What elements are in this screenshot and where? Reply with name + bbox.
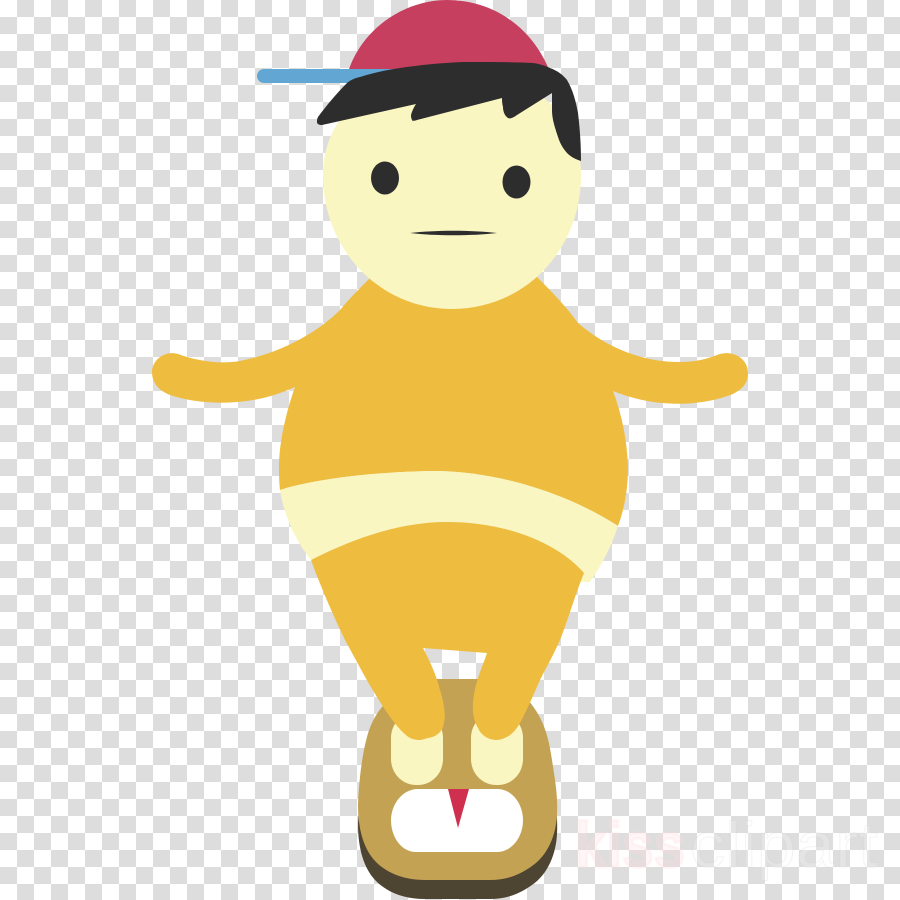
watermark: kissclipart (575, 809, 878, 881)
right foot (471, 712, 523, 785)
right eye (502, 166, 530, 198)
left foot (391, 712, 443, 785)
mouth (410, 231, 497, 235)
cap brim (257, 69, 407, 83)
scale needle (448, 789, 469, 828)
waist band (280, 471, 618, 582)
hair (317, 62, 581, 161)
body and arms (152, 275, 748, 740)
scale top (358, 679, 557, 880)
watermark: kissclipart: clipart (690, 809, 878, 881)
torso with arms (152, 275, 748, 526)
watermark: kissclipart: kiss (575, 809, 685, 881)
scale display (391, 789, 523, 852)
left eye (371, 162, 399, 194)
legs (311, 522, 584, 740)
face (323, 70, 581, 309)
weighing scale (358, 679, 557, 899)
head (317, 62, 581, 309)
cap dome (348, 0, 550, 72)
scale base shadow (358, 679, 557, 899)
